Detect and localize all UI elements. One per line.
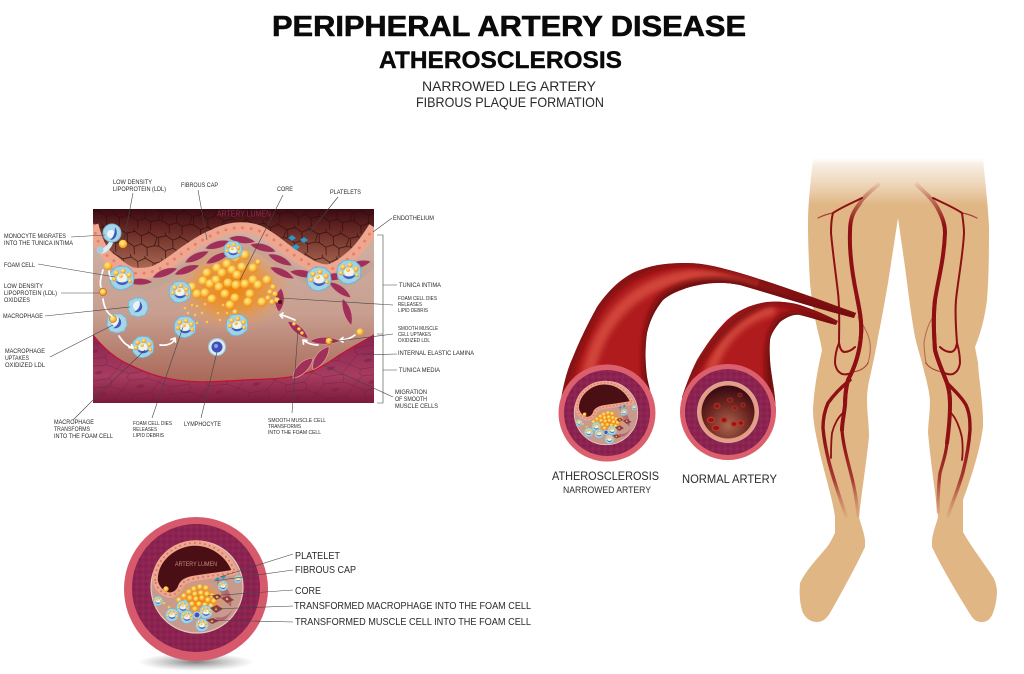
subtitle: FIBROUS PLAQUE FORMATION <box>416 94 604 110</box>
labels: left side of diagram: MACROPHAGE <box>54 419 94 426</box>
lipid core <box>184 250 280 324</box>
labels: left side of diagram: FOAM CELL <box>4 262 35 269</box>
labels: cross-section callouts: TRANSFORMED MACROPHAGE INTO THE FOAM CELL <box>294 600 531 612</box>
foam cells <box>110 241 361 358</box>
labels: right side of diagram: TRANSFORMS <box>268 424 301 430</box>
labels: right side of diagram: FOAM CELL DIES <box>398 296 437 302</box>
debris and oxidized droplets on muscle cells <box>278 300 304 335</box>
labels: right side of diagram: CORE <box>277 186 293 193</box>
labels: left side of diagram: RELEASES <box>133 427 157 433</box>
shadow under cross-section <box>138 653 254 671</box>
red blood cells <box>707 393 745 431</box>
label: artery lumen small: ARTERY LUMEN <box>175 561 217 568</box>
arrows: cell migration path <box>100 270 355 348</box>
labels: left side of diagram: LIPOPROTEIN (LDL) <box>4 290 57 297</box>
title <box>272 11 746 74</box>
labels: right side of diagram: TUNICA MEDIA <box>399 367 441 374</box>
labels: cross-section callouts: PLATELET <box>295 550 341 562</box>
labels: right side of diagram: LIPID DEBRIS <box>398 308 428 314</box>
macrophages <box>107 298 148 333</box>
plaque interior <box>574 381 638 445</box>
labels: left side of diagram: INTO THE TUNICA INTIMA <box>4 240 74 247</box>
labels: right side of diagram <box>268 186 475 436</box>
labels: left side of diagram: LYMPHOCYTE <box>184 421 221 428</box>
labels: right side of diagram: INTERNAL ELASTIC LAMINA <box>398 350 475 357</box>
labels: cross-section callouts: CORE <box>295 585 321 597</box>
LDL particles <box>99 240 364 344</box>
labels: right side of diagram: OXIDIZED LDL <box>398 338 430 344</box>
labels: left side of diagram: MONOCYTE MIGRATES <box>4 233 66 240</box>
labels: right side of diagram: SMOOTH MUSCLE <box>398 326 438 332</box>
labels: left side of diagram: LOW DENSITY <box>4 283 43 290</box>
labels: right side of diagram: TUNICA INTIMA <box>399 282 442 289</box>
labels: left side of diagram: FIBROUS CAP <box>181 182 218 189</box>
labels: artery tubes: NORMAL ARTERY <box>682 472 777 486</box>
legs <box>800 158 997 622</box>
labels: cross-section callouts: FIBROUS CAP <box>295 564 356 576</box>
artery wall rings <box>124 517 268 661</box>
panel: round cross-section with plaque <box>124 517 268 671</box>
title: PERIPHERAL ARTERY DISEASE <box>272 11 746 43</box>
labels: right side of diagram: MIGRATION <box>395 389 427 396</box>
labels: left side of diagram: OXIDIZED LDL <box>5 362 46 369</box>
labels: right side of diagram: RELEASES <box>398 302 422 308</box>
wall rings <box>680 364 776 460</box>
labels: artery tubes: ATHEROSCLEROSIS <box>552 469 659 483</box>
labels: left side of diagram: OXIDIZES <box>4 297 30 304</box>
labels: left side of diagram: TRANSFORMS <box>54 426 90 433</box>
labels: left side of diagram: LIPID DEBRIS <box>133 433 164 439</box>
platelets <box>288 235 308 250</box>
subtitle <box>416 78 604 110</box>
label: artery lumen: ARTERY LUMEN <box>217 210 271 218</box>
labels: right side of diagram: CELL UPTAKES <box>398 332 431 338</box>
panel: tunica cross-section diagram <box>93 209 374 403</box>
labels: artery tubes <box>552 469 777 496</box>
title: ATHEROSCLEROSIS <box>379 47 622 74</box>
labels: cross-section callouts: TRANSFORMED MUSCLE CELL INTO THE FOAM CELL <box>295 616 531 628</box>
labels: left side of diagram: MACROPHAGE <box>5 348 45 355</box>
labels: left side of diagram: LOW DENSITY <box>113 179 152 186</box>
plaque interior <box>151 541 243 633</box>
labels: left side of diagram: LIPOPROTEIN (LDL) <box>113 186 166 193</box>
smooth muscle cells <box>127 234 372 381</box>
labels: right side of diagram: ENDOTHELIUM <box>393 215 434 222</box>
labels: right side of diagram: INTO THE FOAM CELL <box>268 430 321 436</box>
labels: left side of diagram <box>3 179 221 440</box>
labels: left side of diagram: INTO THE FOAM CELL <box>54 433 113 440</box>
lumen and endothelium <box>700 384 756 440</box>
wall rings <box>558 364 656 462</box>
subtitle: NARROWED LEG ARTERY <box>422 78 597 94</box>
labels: artery tubes: NARROWED ARTERY <box>563 485 652 496</box>
artery tube: normal <box>680 302 838 460</box>
artery tube: atherosclerosis <box>550 255 860 462</box>
labels: right side of diagram: SMOOTH MUSCLE CELL <box>268 418 326 424</box>
arteries: left leg <box>818 185 878 516</box>
leader lines and bracket <box>38 190 397 420</box>
arteries: right leg <box>917 185 977 516</box>
labels: left side of diagram: UPTAKES <box>5 355 29 362</box>
labels: left side of diagram: MACROPHAGE <box>3 313 43 320</box>
labels: left side of diagram: FOAM CELL DIES <box>133 421 172 427</box>
monocyte <box>96 224 121 254</box>
labels: right side of diagram: PLATELETS <box>330 189 361 196</box>
labels: right side of diagram: MUSCLE CELLS <box>395 403 438 410</box>
labels: right side of diagram: OF SMOOTH <box>395 396 427 403</box>
lymphocyte <box>208 338 226 356</box>
labels: cross-section callouts <box>206 550 531 628</box>
